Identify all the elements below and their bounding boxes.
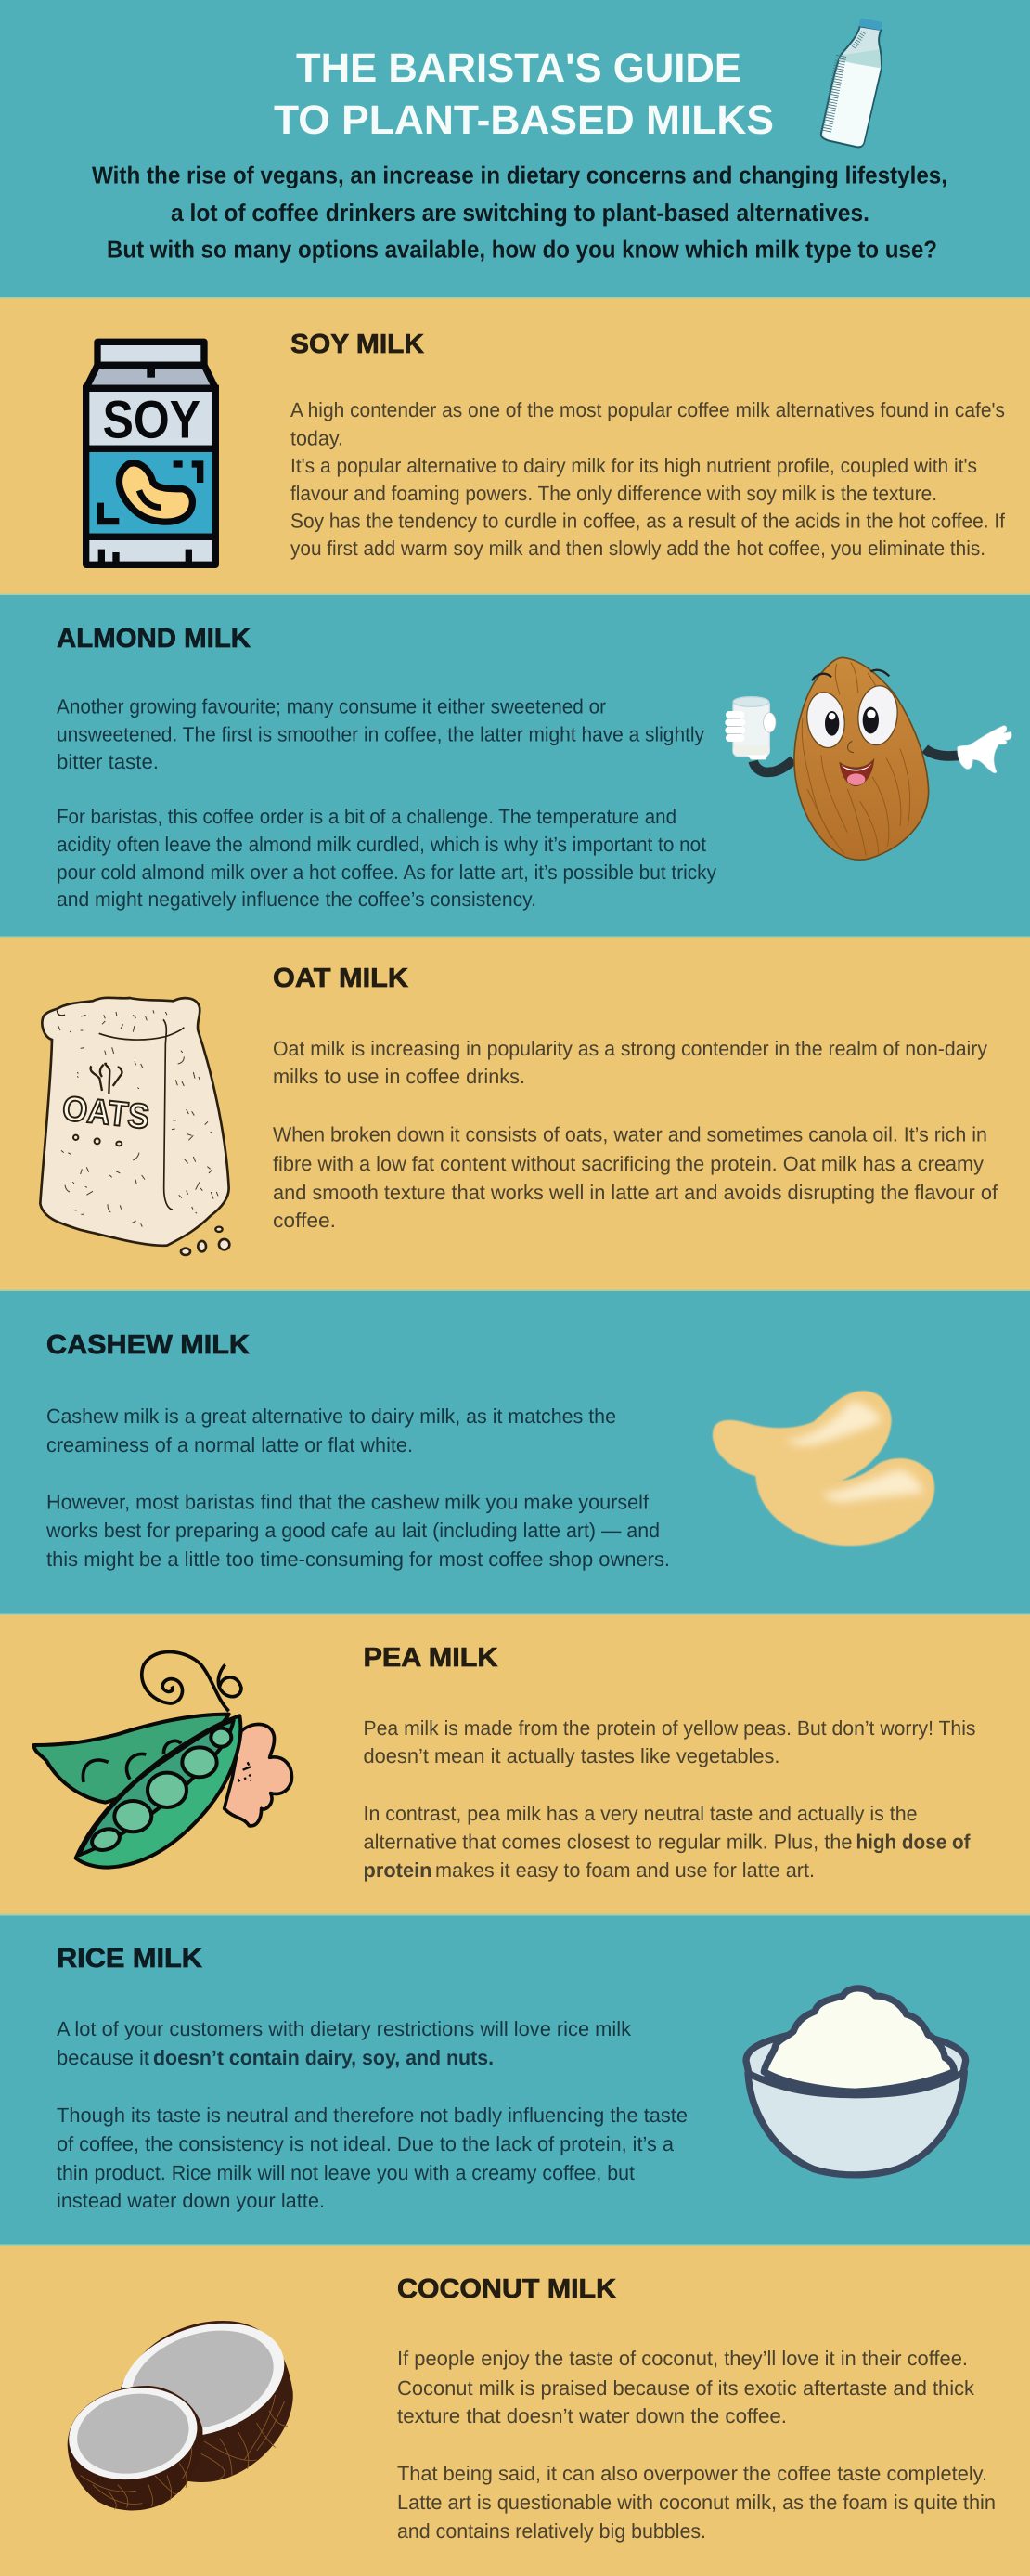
text: pea milk description: Pea milk is made from the protein of yellow peas. But don’t worry! This: [364, 1716, 976, 1740]
panel: header: [0, 0, 1030, 298]
text: coconut milk description: If people enjoy the taste of coconut, they’ll love it in their coffee.: [397, 2347, 968, 2370]
icon: soy carton: SOY: [103, 390, 200, 449]
icon: rice bowl: [746, 1988, 966, 2175]
panel: cashew milk: [0, 1290, 1030, 1614]
text: soy milk description: flavour and foaming powers. The only difference with soy milk is the texture.: [290, 482, 937, 505]
text: almond milk description: acidity often leave the almond milk curdled, which is why it’s important to not: [57, 833, 706, 856]
text: rice milk description: doesn’t contain dairy, soy, and nuts.: [153, 2046, 494, 2069]
panel: coconut milk: [0, 2245, 1030, 2576]
title: THE BARISTA'S GUIDE: [296, 45, 741, 91]
text: coconut milk description: and contains relatively big bubbles.: [397, 2519, 706, 2543]
panel: almond milk: [0, 594, 1030, 937]
text: oat milk description: milks to use in coffee drinks.: [273, 1065, 525, 1088]
text: cashew milk description: this might be a little too time-consuming for most coffee shop owners.: [46, 1547, 670, 1571]
icon: milk bottle: [821, 18, 882, 147]
text: soy milk description: A high contender as one of the most popular coffee milk alternatives found in cafe's: [290, 398, 1005, 421]
text: pea milk description: makes it easy to foam and use for latte art.: [435, 1858, 815, 1882]
text: soy milk description: [290, 398, 1006, 560]
icon: oats sack: OATS: [60, 1089, 151, 1136]
text: almond milk description: bitter taste.: [57, 750, 159, 773]
text: cashew milk description: Cashew milk is a great alternative to dairy milk, as it matches the: [46, 1405, 616, 1428]
text: soy milk description: Soy has the tendency to curdle in coffee, as a result of the acids in the hot coffee. If: [290, 509, 1006, 533]
text: coconut milk description: [397, 2347, 996, 2543]
text: cashew milk description: However, most baristas find that the cashew milk you make yourself: [46, 1491, 650, 1513]
text: pea milk description: alternative that comes closest to regular milk. Plus, the: [364, 1831, 852, 1853]
text: almond milk description: [57, 694, 716, 911]
text: rice milk description: thin product. Rice milk will not leave you with a creamy coffee, but: [57, 2161, 635, 2184]
text: oat milk description: fibre with a low fat content without sacrificing the protein. Oat milk has a creamy: [273, 1152, 984, 1175]
heading: almond milk: ALMOND MILK: [57, 624, 251, 654]
text: rice milk description: because it: [57, 2046, 149, 2069]
text: rice milk description: instead water down your latte.: [57, 2189, 325, 2212]
icon: pea pod: [34, 1652, 291, 1868]
text: oat milk description: When broken down it consists of oats, water and sometimes canola oil. It’s rich in: [273, 1123, 987, 1146]
icon: almond character: [728, 657, 1011, 860]
text: cashew milk description: [45, 1405, 670, 1571]
intro text: But with so many options available, how do you know which milk type to use?: [107, 236, 937, 264]
text: cashew milk description: creaminess of a normal latte or flat white.: [46, 1433, 413, 1456]
heading: coconut milk: COCONUT MILK: [397, 2274, 616, 2304]
text: pea milk description: [364, 1716, 976, 1882]
text: rice milk description: Though its taste is neutral and therefore not badly influencing the taste: [57, 2104, 688, 2127]
text: coconut milk description: That being said, it can also overpower the coffee taste completely.: [397, 2462, 987, 2485]
text: pea milk description: doesn’t mean it actually tastes like vegetables.: [364, 1744, 779, 1767]
title: TO PLANT-BASED MILKS: [274, 97, 774, 143]
icon: cashews: [713, 1391, 934, 1546]
text: oat milk description: coffee.: [273, 1209, 336, 1232]
heading: pea milk: PEA MILK: [364, 1643, 498, 1673]
heading: oat milk: OAT MILK: [273, 964, 408, 993]
intro text: With the rise of vegans, an increase in dietary concerns and changing lifestyles,: [92, 162, 947, 189]
panel: rice milk: [0, 1914, 1030, 2245]
text: coconut milk description: Latte art is questionable with coconut milk, as the foam is quite thin: [397, 2491, 996, 2514]
heading: soy milk: SOY MILK: [290, 330, 424, 359]
panel: oat milk: [0, 936, 1030, 1290]
text: cashew milk description: works best for preparing a good cafe au lait (including latte art) — and: [45, 1519, 660, 1542]
text: soy milk description: today.: [290, 427, 343, 449]
text: coconut milk description: Coconut milk is praised because of its exotic aftertaste and thick: [397, 2376, 975, 2400]
text: almond milk description: unsweetened. The first is smoother in coffee, the latter might have a slightly: [57, 722, 704, 746]
heading: cashew milk: CASHEW MILK: [46, 1330, 250, 1360]
icon: oats sack: [40, 998, 229, 1255]
text: rice milk description: [57, 2017, 688, 2212]
text: pea milk description: In contrast, pea milk has a very neutral taste and actually is the: [364, 1802, 917, 1825]
text: coconut milk description: texture that doesn’t water down the coffee.: [397, 2404, 787, 2427]
text: pea milk description: high dose of: [856, 1831, 971, 1853]
text: pea milk description: protein: [364, 1858, 432, 1882]
icon: soy carton: [86, 342, 215, 564]
panel: pea milk: [0, 1613, 1030, 1914]
text: oat milk description: and smooth texture that works well in latte art and avoids disrupting the flavour of: [273, 1181, 998, 1204]
heading: rice milk: RICE MILK: [57, 1944, 202, 1974]
intro text: a lot of coffee drinkers are switching to plant-based alternatives.: [171, 199, 869, 227]
panel: soy milk: [0, 297, 1030, 594]
text: rice milk description: of coffee, the consistency is not ideal. Due to the lack of protein, it’s a: [57, 2132, 675, 2155]
text: rice milk description: A lot of your customers with dietary restrictions will love rice milk: [57, 2017, 632, 2040]
text: soy milk description: you first add warm soy milk and then slowly add the hot coffee, you eliminate this.: [290, 537, 985, 560]
text: oat milk description: [273, 1037, 998, 1232]
text: almond milk description: pour cold almond milk over a hot coffee. As for latte art, it’s possible but tricky: [57, 861, 716, 884]
text: soy milk description: It's a popular alternative to dairy milk for its high nutrient profile, coupled with it's: [290, 454, 977, 477]
text: oat milk description: Oat milk is increasing in popularity as a strong contender in the realm of non-dairy: [273, 1037, 987, 1060]
text: almond milk description: and might negatively influence the coffee’s consistency.: [57, 887, 536, 911]
title: [274, 45, 774, 143]
text: almond milk description: For baristas, this coffee order is a bit of a challenge. The temperature and: [57, 805, 676, 828]
intro text: [92, 162, 947, 264]
icon: coconut halves: [61, 2303, 299, 2510]
text: almond milk description: Another growing favourite; many consume it either sweetened or: [57, 694, 606, 718]
